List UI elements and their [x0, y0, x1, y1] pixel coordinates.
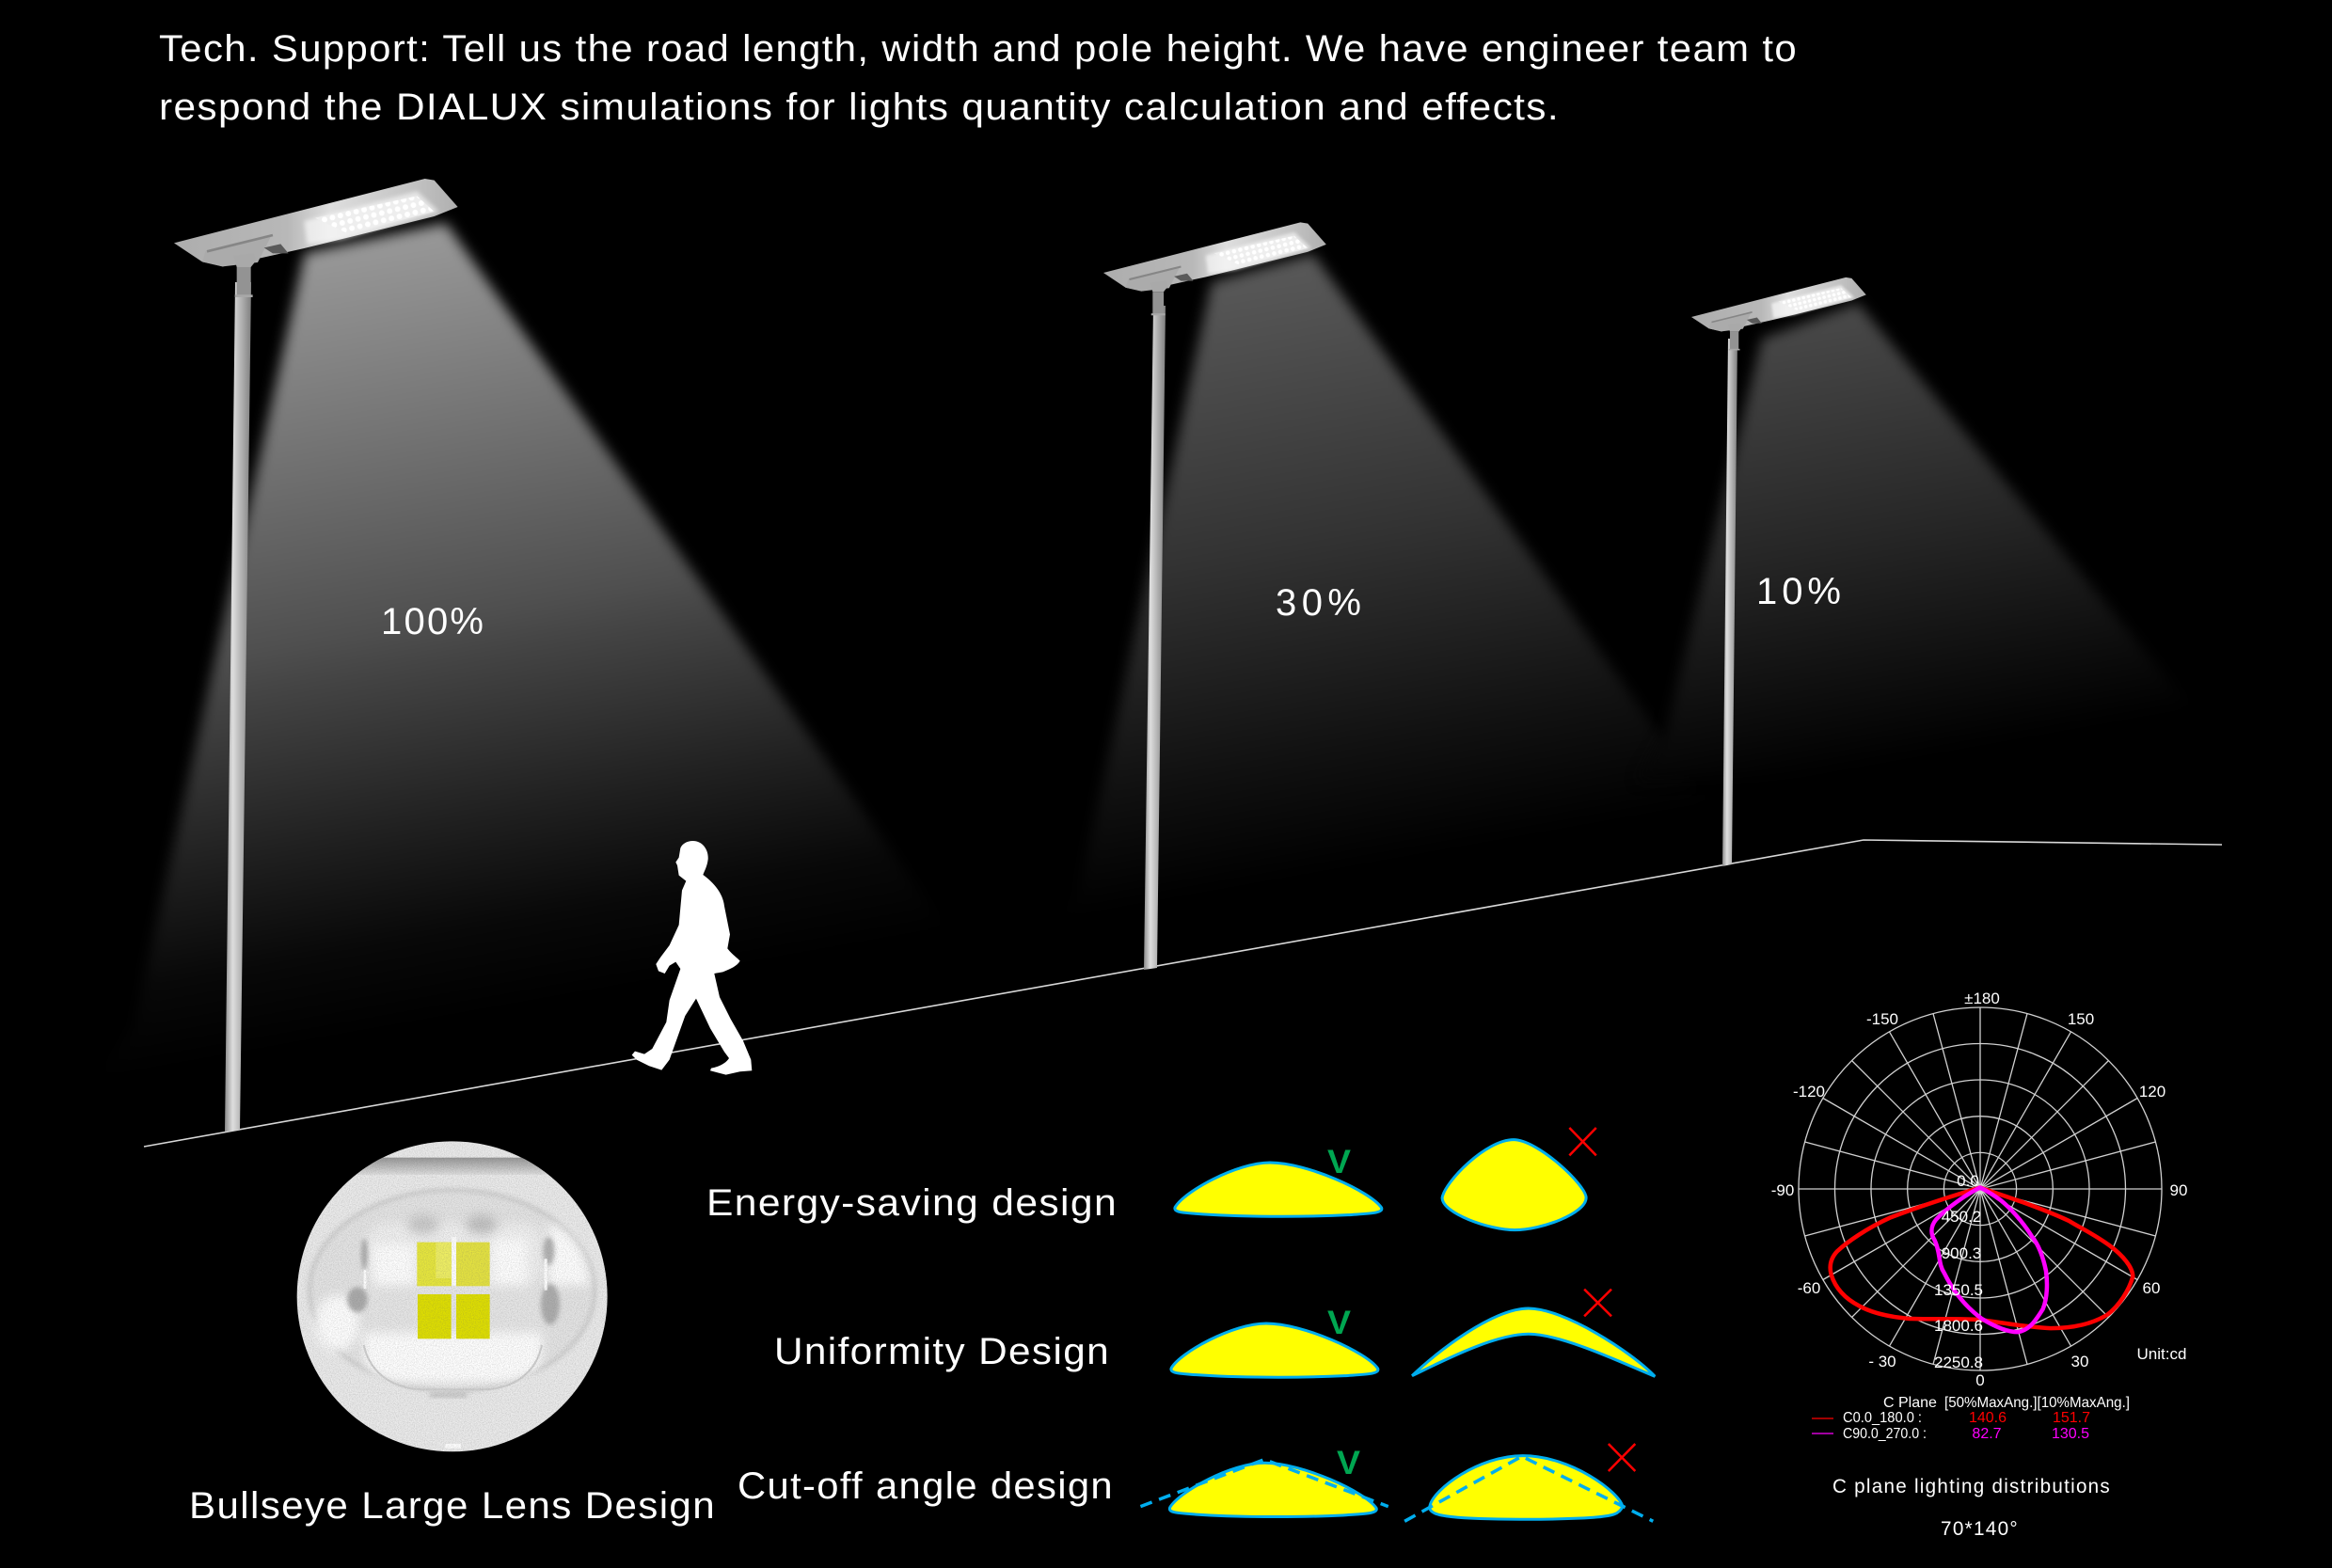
polar labels: 0: [1975, 1371, 1985, 1389]
label: energy-saving: Energy-saving design: [706, 1182, 1118, 1224]
icon: red cross 2: [1584, 1290, 1611, 1316]
polar labels: -150: [1866, 1010, 1898, 1028]
shape: cut-off good: [1169, 1463, 1376, 1517]
icon: walking person: [632, 841, 752, 1075]
icon: red cross 3: [1609, 1444, 1635, 1471]
polar labels: 2250.8: [1934, 1354, 1983, 1371]
polar labels: 60: [2143, 1279, 2160, 1297]
chart: polar light distribution: [1771, 990, 2187, 1442]
icon: green check 2: V: [1327, 1305, 1352, 1341]
icon: green check 3: V: [1337, 1445, 1361, 1481]
yellow light distribution diagrams: [1140, 1128, 1655, 1521]
light beam: 10%: [1637, 303, 2239, 781]
polar labels: [1771, 990, 2187, 1389]
line: cut-off bad dashes: [1404, 1456, 1653, 1521]
polar grid: [1799, 1007, 2162, 1370]
title: [159, 28, 1798, 128]
shape: cut-off bad: [1430, 1456, 1623, 1519]
polar legend: C Plane: [1883, 1395, 1937, 1411]
line: cut-off good dashes: [1140, 1460, 1388, 1507]
polar labels: 120: [2139, 1083, 2165, 1101]
polar labels: 0.0: [1957, 1172, 1979, 1190]
polar labels: -120: [1793, 1083, 1825, 1101]
label: 30%: 30%: [1276, 582, 1361, 624]
polar legend: 82.7: [1972, 1426, 2002, 1442]
title: respond the DIALUX simulations for lights quantity calculation and effects.: [159, 87, 1560, 128]
shape: energy-saving good: [1175, 1163, 1382, 1216]
icon: bullseye lens photo: [292, 1138, 614, 1458]
shape: uniformity bad: [1412, 1308, 1655, 1376]
label: 100%: 100%: [381, 601, 484, 642]
caption: C plane: C plane lighting distributions: [1832, 1476, 2111, 1497]
polar labels: -60: [1798, 1279, 1820, 1297]
shape: energy-saving bad: [1442, 1140, 1586, 1230]
curve: C0-180: [1831, 1188, 2133, 1328]
polar labels: 1350.5: [1934, 1281, 1983, 1299]
polar legend: [1812, 1395, 2130, 1442]
icon: green check 1: V: [1327, 1144, 1352, 1180]
polar labels: 900.3: [1942, 1244, 1981, 1262]
street lamp: 10%: [1691, 277, 1866, 866]
shape: uniformity good: [1171, 1323, 1378, 1377]
title: Tech. Support: Tell us the road length, width and pole height. We have engineer team to: [159, 28, 1798, 70]
polar labels: 450.2: [1942, 1208, 1981, 1226]
curve: C90-270: [1931, 1188, 2047, 1332]
polar labels: 1800.6: [1934, 1317, 1983, 1335]
label: lens design: Bullseye Large Lens Design: [189, 1485, 716, 1527]
icon: red cross 1: [1569, 1128, 1596, 1155]
caption: beam angle: 70*140°: [1941, 1518, 2019, 1540]
ground line: [144, 840, 2222, 1147]
label: cut-off: Cut-off angle design: [738, 1465, 1114, 1507]
polar labels: ±180: [1964, 990, 2000, 1007]
label: uniformity: Uniformity Design: [774, 1331, 1110, 1372]
label: 10%: 10%: [1756, 571, 1841, 612]
street lamp: 100%: [174, 179, 458, 1132]
street lamp: 30%: [1103, 222, 1326, 970]
polar labels: -90: [1771, 1181, 1794, 1199]
polar legend: C90.0_270.0 :: [1843, 1426, 1927, 1442]
polar legend: 140.6: [1969, 1410, 2007, 1426]
polar legend: 151.7: [2053, 1410, 2090, 1426]
light beam: 100%: [38, 223, 1091, 1166]
polar legend: C0.0_180.0 :: [1843, 1410, 1922, 1426]
polar labels: Unit:cd: [2137, 1345, 2186, 1363]
light beam: 30%: [1044, 254, 1787, 941]
polar labels: 150: [2068, 1010, 2094, 1028]
polar labels: - 30: [1868, 1353, 1896, 1370]
polar labels: 90: [2170, 1181, 2187, 1199]
polar legend: [50%MaxAng.][10%MaxAng.]: [1944, 1395, 2130, 1411]
polar labels: 30: [2071, 1353, 2088, 1370]
polar legend: 130.5: [2052, 1426, 2089, 1442]
